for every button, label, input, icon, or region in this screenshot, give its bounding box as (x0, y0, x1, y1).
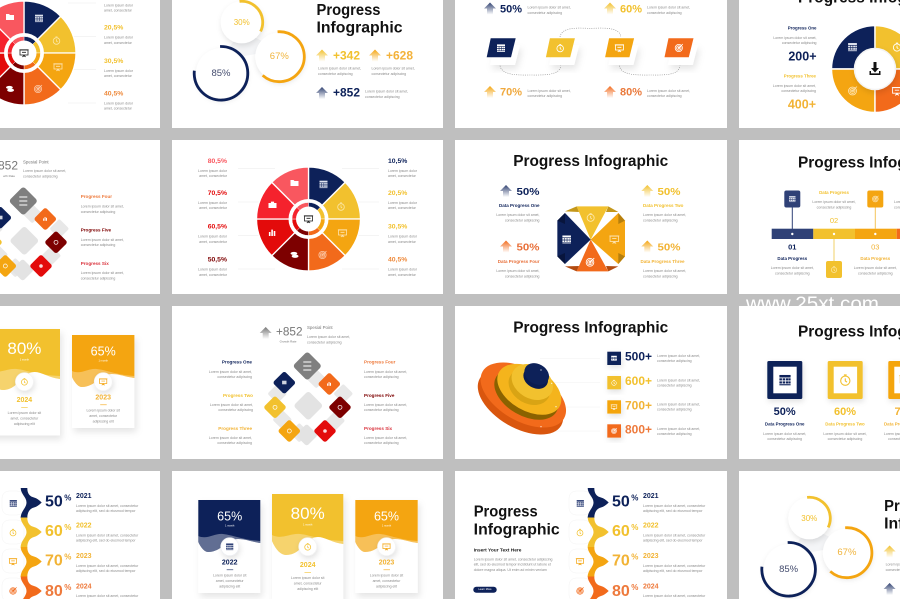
panel: diamond grid: Progress Five (364, 393, 395, 398)
panel: octagon data progress: 50% (658, 242, 681, 254)
panel: icon frames (cropped right): Data Progress Two (825, 422, 865, 426)
panel: octagon data progress: consectetur adipiscing (505, 218, 540, 222)
panel: four quadrant donut: 400+ (788, 98, 816, 112)
panel: circular pie with right labels (cropped): amet, consectetur (104, 8, 133, 12)
panel: flow of parallelograms: Lorem ipsum dolor sit amet, (528, 6, 571, 10)
panel: flow of parallelograms: 60% (620, 4, 642, 16)
panel: eight segment pie: 60,5% (208, 224, 227, 230)
panel: three wave cards: 1 month (225, 524, 235, 528)
panel: diamond grid (cropped left): Spesial Point (23, 160, 49, 164)
panel: spine percentages (cropped left): Lorem ipsum dolor sit amet, consectetur (76, 564, 139, 568)
panel: progress circles (cropped right) (739, 471, 900, 599)
panel: flow of parallelograms: consectetur adipiscing (528, 94, 562, 98)
panel: eight segment pie: 30,5% (388, 224, 407, 230)
panel: progress circles: Lorem ipsum dolor sit amet, (318, 66, 361, 70)
panel: icon frames (cropped right): 60% (834, 406, 856, 418)
panel: icon frames (cropped right): Data Progress One (765, 422, 805, 426)
panel: diamond grid: consectetur adipiscing (364, 441, 399, 445)
panel: diamond grid: Lorem ipsum dolor sit amet, (209, 370, 252, 374)
panel: eight segment pie: amet, consectetur (388, 174, 417, 178)
panel: octagon data progress: consectetur adipiscing (643, 218, 678, 222)
panel: wave cards (cropped left): 1 month (99, 358, 108, 362)
panel: diamond grid (cropped left): Lorem ipsum dolor sit amet, (23, 169, 66, 173)
panel: title with spine percentages: Insert Your Text Here (474, 548, 522, 554)
panel: eight segment pie: 80,5% (208, 158, 227, 165)
panel: layered cone: consectetur adipiscing (657, 384, 692, 388)
panel: timeline: Lorem ipsum dolor sit amet, (854, 266, 897, 270)
panel: timeline: Lorem ipsum dolor sit amet, (812, 200, 856, 204)
panel: spine percentages (cropped left): 2021 (76, 493, 92, 500)
panel: timeline: Lorem ipsum dolor sit amet, (771, 266, 814, 270)
panel: flow of parallelograms: Lorem ipsum dolor sit amet, (647, 89, 690, 93)
panel: layered cone: consectetur adipiscing (657, 359, 692, 363)
panel: three wave cards: adipiscing elit (297, 587, 318, 591)
panel: diamond grid: Growth Rate (280, 340, 297, 344)
panel: octagon data progress: Lorem ipsum dolor sit amet, (496, 213, 540, 217)
panel: diamond grid (cropped left): Progress Six (81, 261, 109, 266)
panel: three wave cards: 1 month (303, 522, 313, 526)
panel: progress circles: +342 (333, 50, 360, 62)
panel: octagon data progress: Lorem ipsum dolor sit amet, (496, 269, 540, 273)
panel: progress circles (cropped right): 30% (801, 514, 817, 523)
panel: timeline: 01 (788, 242, 796, 252)
panel: flow of parallelograms: consectetur adipiscing (647, 11, 682, 15)
panel: eight segment pie: 70,5% (208, 190, 227, 197)
panel: octagon data progress: Progress Infographic (513, 153, 669, 170)
panel: flow of parallelograms: Lorem ipsum dolor sit amet, (528, 89, 571, 93)
panel: progress circles: 30% (234, 18, 250, 27)
panel: diamond grid (cropped left): consectetur adipiscing (81, 210, 115, 214)
panel: circular pie with right labels (cropped): 40,5% (104, 90, 123, 98)
panel: spine percentages (cropped left): adipiscing elit, sed do eiusmod tempor (76, 509, 136, 513)
panel: wave cards (cropped left): 1 month (20, 358, 30, 362)
panel: timeline: consectetur adipiscing (817, 206, 851, 210)
panel: flow of parallelograms (455, 0, 727, 128)
panel: layered cone: 600+ (625, 376, 652, 388)
panel: spine percentages (cropped left): Lorem ipsum dolor sit amet, consectetur (76, 534, 139, 538)
panel: spine percentages (cropped left): % (64, 494, 71, 502)
panel: octagon data progress: Data Progress One (499, 203, 540, 208)
panel: title with spine percentages: Lorem ipsum dolor sit amet, consectetur (643, 534, 706, 538)
panel: diamond grid: consectetur adipiscing (307, 340, 342, 344)
panel: circular pie with right labels (cropped): amet, consectetur (104, 41, 133, 45)
panel: eight segment pie: amet, consectetur (199, 206, 228, 210)
panel: diamond grid: Progress Four (364, 360, 396, 364)
panel: spine percentages (cropped left): % (64, 583, 71, 592)
panel: layered cone: consectetur adipiscing (657, 432, 692, 436)
panel: timeline: 02 (830, 216, 838, 225)
panel: diamond grid (cropped left): Progress Five (81, 228, 112, 232)
panel: circular pie with right labels (cropped): amet, consectetur (104, 74, 133, 78)
panel: progress circles: 85% (211, 68, 231, 79)
panel: spine percentages (cropped left): 60 (45, 523, 63, 540)
panel: layered cone: Lorem ipsum dolor sit amet, (657, 427, 700, 431)
panel: progress circles: Progress (316, 2, 380, 19)
panel: progress circles: Lorem ipsum dolor sit amet, (372, 66, 415, 70)
panel: four quadrant donut: Progress One (788, 26, 817, 30)
panel: wave cards (cropped left): 2024 (17, 397, 32, 404)
panel: three wave cards: 2023 (379, 560, 394, 566)
panel: eight segment pie: Lorem ipsum dolor (388, 268, 418, 272)
panel: three wave cards (172, 471, 443, 599)
panel: progress circles: consectetur adipiscing (365, 95, 400, 99)
panel: progress circles: consectetur adipiscing (318, 72, 353, 76)
panel: layered cone: Lorem ipsum dolor sit amet, (657, 402, 700, 406)
panel: octagon data progress: consectetur adipiscing (505, 274, 540, 278)
panel: diamond grid: Progress Three (218, 426, 252, 431)
panel: four quadrant donut: 200+ (788, 50, 816, 64)
panel: spine percentages (cropped left): % (64, 523, 71, 532)
panel: title with spine percentages: 2023 (643, 553, 659, 560)
panel: circular pie with right labels (cropped) (0, 0, 160, 128)
panel: title with spine percentages: 2021 (643, 493, 659, 500)
panel: progress circles: Lorem ipsum dolor sit amet, (365, 90, 408, 94)
panel: octagon data progress: Lorem ipsum dolor sit amet, (643, 213, 686, 217)
panel: eight segment pie: Lorem ipsum dolor (388, 201, 418, 205)
panel: title with spine percentages: 60 (612, 523, 630, 540)
button (473, 587, 497, 593)
panel: title with spine percentages: 50 (612, 494, 630, 510)
panel: flow of parallelograms: 50% (500, 4, 522, 16)
panel: circular pie with right labels (cropped): Lorem ipsum dolor (104, 36, 134, 40)
panel: diamond grid: Lorem ipsum dolor sit amet, (364, 436, 407, 440)
panel: timeline (739, 140, 900, 294)
panel: diamond grid: consectetur adipiscing (217, 375, 252, 379)
panel: eight segment pie: 10,5% (388, 158, 407, 165)
panel: eight segment pie: amet, consectetur (388, 273, 417, 277)
panel: octagon data progress: Data Progress Two (643, 203, 684, 208)
panel: eight segment pie (172, 140, 443, 294)
panel: spine percentages (cropped left): 2022 (76, 522, 92, 530)
panel: four quadrant donut: Lorem ipsum dolor sit amet, (773, 36, 817, 40)
panel: layered cone: 700+ (625, 400, 652, 412)
panel: eight segment pie: 40,5% (388, 256, 407, 264)
panel: title with spine percentages: Lorem ipsum dolor sit amet, consectetur (643, 564, 706, 568)
panel: title with spine percentages: % (631, 494, 638, 502)
panel: three wave cards: Lorem ipsum dolor sit (291, 576, 324, 580)
panel: diamond grid: +852 (276, 324, 303, 338)
panel: diamond grid (cropped left): consectetur adipiscing (81, 243, 115, 247)
panel: diamond grid (172, 306, 443, 459)
panel: title with spine percentages: Lorem ipsum dolor sit amet, consectetur (643, 504, 706, 508)
panel: progress circles (172, 0, 443, 128)
panel: eight segment pie: amet, consectetur (388, 206, 417, 210)
panel: eight segment pie: Lorem ipsum dolor (198, 169, 228, 173)
panel: four quadrant donut: Lorem ipsum dolor sit amet, (773, 84, 816, 88)
panel: title with spine percentages: dolore magna aliqua. Ut enim ad minim veniam (474, 568, 547, 572)
panel: diamond grid (cropped left): Lorem ipsum dolor sit amet, (81, 271, 124, 275)
panel: layered cone: 800+ (625, 424, 652, 436)
button: Learn More (478, 587, 492, 591)
panel: progress circles: +852 (333, 88, 360, 100)
panel: diamond grid (cropped left): Lorem ipsum dolor sit amet, (81, 204, 124, 208)
panel: three wave cards: 2024 (300, 562, 316, 569)
panel: three wave cards: amet, consectetur (373, 579, 401, 583)
panel: title with spine percentages: 70 (612, 552, 630, 570)
panel: icon frames (cropped right): consectetur adipiscing (828, 437, 862, 441)
panel: three wave cards: 2022 (222, 560, 238, 566)
panel: diamond grid (cropped left): consectetur adipiscing (81, 276, 115, 280)
panel: circular pie with right labels (cropped): 20,5% (104, 24, 123, 32)
panel: layered cone: 500+ (625, 352, 652, 364)
panel: progress circles: 67% (270, 51, 289, 62)
panel: spine percentages (cropped left): Lorem ipsum dolor sit amet, consectetur (76, 594, 139, 598)
panel: flow of parallelograms: consectetur adipiscing (528, 11, 562, 15)
panel: diamond grid: Progress One (222, 360, 252, 364)
panel: wave cards (cropped left): 65% (91, 345, 116, 359)
panel: flow of parallelograms: 70% (500, 86, 522, 98)
panel: diamond grid: consectetur adipiscing (364, 408, 399, 412)
watermark: www.25xt.com (745, 294, 879, 315)
panel: title with spine percentages: Infographic (474, 522, 560, 538)
panel: wave cards (cropped left) (0, 306, 160, 459)
panel: wave cards (cropped left): Lorem ipsum dolor sit (86, 408, 120, 412)
panel: icon frames (cropped right): consectetur adipiscing (767, 437, 802, 441)
panel: three wave cards: 65% (374, 510, 399, 524)
panel: three wave cards: amet, consectetur (216, 579, 244, 583)
panel: three wave cards: amet, consectetur (294, 582, 322, 586)
panel: octagon data progress: 50% (516, 242, 540, 254)
panel: three wave cards: adipiscing elit (376, 584, 397, 588)
panel: circular pie with right labels (cropped): Lorem ipsum dolor (104, 69, 134, 73)
panel: icon frames (cropped right) (739, 306, 900, 459)
panel: four quadrant donut: consectetur adipiscing (781, 89, 816, 93)
panel: spine percentages (cropped left): 2024 (76, 584, 92, 590)
panel: spine percentages (cropped left) (0, 471, 160, 599)
panel: diamond grid: Lorem ipsum dolor sit amet, (364, 403, 407, 407)
panel: timeline: consectetur adipiscing (858, 272, 893, 276)
panel: diamond grid: consectetur adipiscing (364, 375, 399, 379)
panel: octagon data progress: 50% (658, 186, 681, 198)
panel: diamond grid: Progress Six (364, 426, 393, 431)
panel: timeline: consectetur adipiscing (775, 272, 810, 276)
panel: title with spine percentages: 2022 (643, 522, 659, 530)
panel: spine percentages (cropped left): 50 (45, 494, 63, 510)
panel: three wave cards: 80% (291, 504, 325, 523)
panel: wave cards (cropped left): amet, consectetur (89, 414, 118, 418)
panel: eight segment pie: Lorem ipsum dolor (198, 268, 228, 272)
panel: layered cone: consectetur adipiscing (657, 408, 692, 412)
panel: wave cards (cropped left): amet, consectetur (10, 416, 39, 420)
panel: circular pie with right labels (cropped): Lorem ipsum dolor (104, 4, 134, 8)
panel: four quadrant donut: consectetur adipiscing (782, 41, 817, 45)
panel: layered cone: Progress Infographic (513, 320, 669, 336)
panel: icon frames (cropped right): Lorem ipsum dolor sit amet, (823, 432, 867, 436)
panel: spine percentages (cropped left): adipiscing elit, sed do eiusmod tempor (76, 538, 136, 542)
panel: eight segment pie: amet, consectetur (199, 240, 228, 244)
panel: spine percentages (cropped left): 70 (45, 552, 63, 570)
panel: title with spine percentages: % (631, 583, 638, 592)
panel: layered cone (455, 306, 727, 459)
panel: timeline: Data Progress (819, 190, 849, 195)
panel: eight segment pie: amet, consectetur (199, 273, 228, 277)
panel: progress circles: consectetur adipiscing (372, 72, 406, 76)
panel: diamond grid: Lorem ipsum dolor sit amet, (209, 436, 252, 440)
panel: eight segment pie: amet, consectetur (388, 240, 417, 244)
panel: diamond grid: Lorem ipsum dolor sit amet, (364, 370, 407, 374)
panel: octagon data progress: consectetur adipiscing (643, 274, 678, 278)
panel: eight segment pie: amet, consectetur (199, 174, 228, 178)
panel: flow of parallelograms: Lorem ipsum dolor sit amet, (647, 6, 690, 10)
panel: three wave cards: 1 month (382, 524, 392, 528)
octagon graphic (557, 206, 625, 271)
panel: eight segment pie: Lorem ipsum dolor (198, 201, 228, 205)
panel: icon frames (cropped right): Lorem ipsum dolor sit amet, (763, 432, 806, 436)
panel: title with spine percentages: 2024 (643, 584, 659, 590)
panel: wave cards (cropped left): adipiscing elit (93, 420, 114, 424)
panel: diamond grid: Lorem ipsum dolor sit amet, (307, 335, 350, 339)
panel: spine percentages (cropped left): % (64, 552, 71, 562)
cone graphic (467, 349, 577, 448)
panel: eight segment pie: 20,5% (388, 190, 407, 197)
panel: octagon data progress (455, 140, 727, 294)
panel: four quadrant donut: Progress Three (784, 74, 817, 78)
panel: title with spine percentages: adipiscing elit, sed do eiusmod tempor (643, 538, 703, 542)
panel: octagon data progress: 50% (516, 186, 540, 198)
panel: diamond grid: consectetur adipiscing (218, 408, 253, 412)
panel: icon frames (cropped right): 50% (774, 406, 796, 418)
panel: circular pie with right labels (cropped): Lorem ipsum dolor (104, 102, 134, 106)
panel: spine percentages (cropped left): Lorem ipsum dolor sit amet, consectetur (76, 504, 139, 508)
panel: layered cone: Lorem ipsum dolor sit amet, (657, 354, 700, 358)
panel: wave cards (cropped left): Lorem ipsum dolor sit (8, 411, 41, 415)
panel: wave cards (cropped left): adipiscing elit (14, 422, 35, 426)
panel: wave cards (cropped left): 2023 (95, 394, 111, 402)
panel: title with spine percentages (455, 471, 727, 599)
panel: timeline: Data Progress (777, 256, 808, 261)
panel: title with spine percentages: Lorem ipsum dolor sit amet, consectetur adipiscing (474, 558, 553, 562)
panel: timeline: 03 (871, 242, 879, 252)
panel: four quadrant donut (739, 0, 900, 128)
panel: circular pie with right labels (cropped): 30,5% (104, 58, 123, 65)
panel: title with spine percentages: elit, sed do eiusmod tempor incididunt ut labore et (474, 562, 551, 566)
panel: title with spine percentages: Lorem ipsum dolor sit amet, consectetur (643, 594, 706, 598)
panel: spine percentages (cropped left): 2023 (76, 553, 92, 560)
panel: diamond grid (cropped left) (0, 140, 160, 294)
panel: three wave cards: adipiscing elit (219, 584, 240, 588)
panel: three wave cards: Lorem ipsum dolor sit (213, 574, 246, 578)
panel: layered cone: Lorem ipsum dolor sit amet, (657, 378, 700, 382)
panel: timeline: Data Progress (860, 256, 891, 261)
panel: circular pie with right labels (cropped): amet, consectetur (104, 106, 133, 110)
panel: three wave cards: 65% (217, 510, 242, 524)
panel: three wave cards: Lorem ipsum dolor sit (370, 574, 403, 578)
panel: spine percentages (cropped left): adipiscing elit, sed do eiusmod tempor (76, 569, 136, 573)
panel: progress circles: +628 (386, 50, 414, 62)
panel: diamond grid: Lorem ipsum dolor sit amet, (210, 403, 253, 407)
panel: diamond grid (cropped left): wth Rate (3, 174, 15, 178)
panel: eight segment pie: Lorem ipsum dolor (388, 169, 418, 173)
panel: title with spine percentages: adipiscing elit, sed do eiusmod tempor (643, 509, 703, 513)
panel: flow of parallelograms: consectetur adipiscing (647, 94, 682, 98)
panel: eight segment pie: 50,5% (208, 256, 227, 264)
panel: title with spine percentages: adipiscing elit, sed do eiusmod tempor (643, 569, 703, 573)
panel: octagon data progress: Data Progress Three (640, 259, 685, 264)
panel: eight segment pie: Lorem ipsum dolor (198, 234, 228, 238)
panel: title with spine percentages: Progress (474, 504, 538, 520)
panel: diamond grid (cropped left): consectetur adipiscing (23, 174, 58, 178)
panel: diamond grid: Progress Two (223, 393, 253, 398)
panel: title with spine percentages: % (631, 523, 638, 532)
panel: octagon data progress: Data Progress Four (498, 259, 540, 264)
panel: wave cards (cropped left): 80% (7, 339, 41, 358)
panel: octagon data progress: Lorem ipsum dolor sit amet, (643, 269, 686, 273)
panel: flow of parallelograms: 80% (620, 86, 642, 98)
panel: title with spine percentages: % (631, 552, 638, 562)
panel: eight segment pie: Lorem ipsum dolor (388, 234, 418, 238)
panel: progress circles: Infographic (316, 20, 403, 36)
panel: diamond grid (cropped left): Progress Four (81, 194, 112, 199)
panel: progress circles (cropped right): 85% (779, 564, 799, 575)
panel: progress circles (cropped right): 67% (837, 547, 857, 558)
panel: diamond grid: consectetur adipiscing (217, 441, 252, 445)
panel: diamond grid: Spesial Point (307, 325, 333, 330)
panel: diamond grid (cropped left): Lorem ipsum dolor sit amet, (81, 238, 124, 242)
